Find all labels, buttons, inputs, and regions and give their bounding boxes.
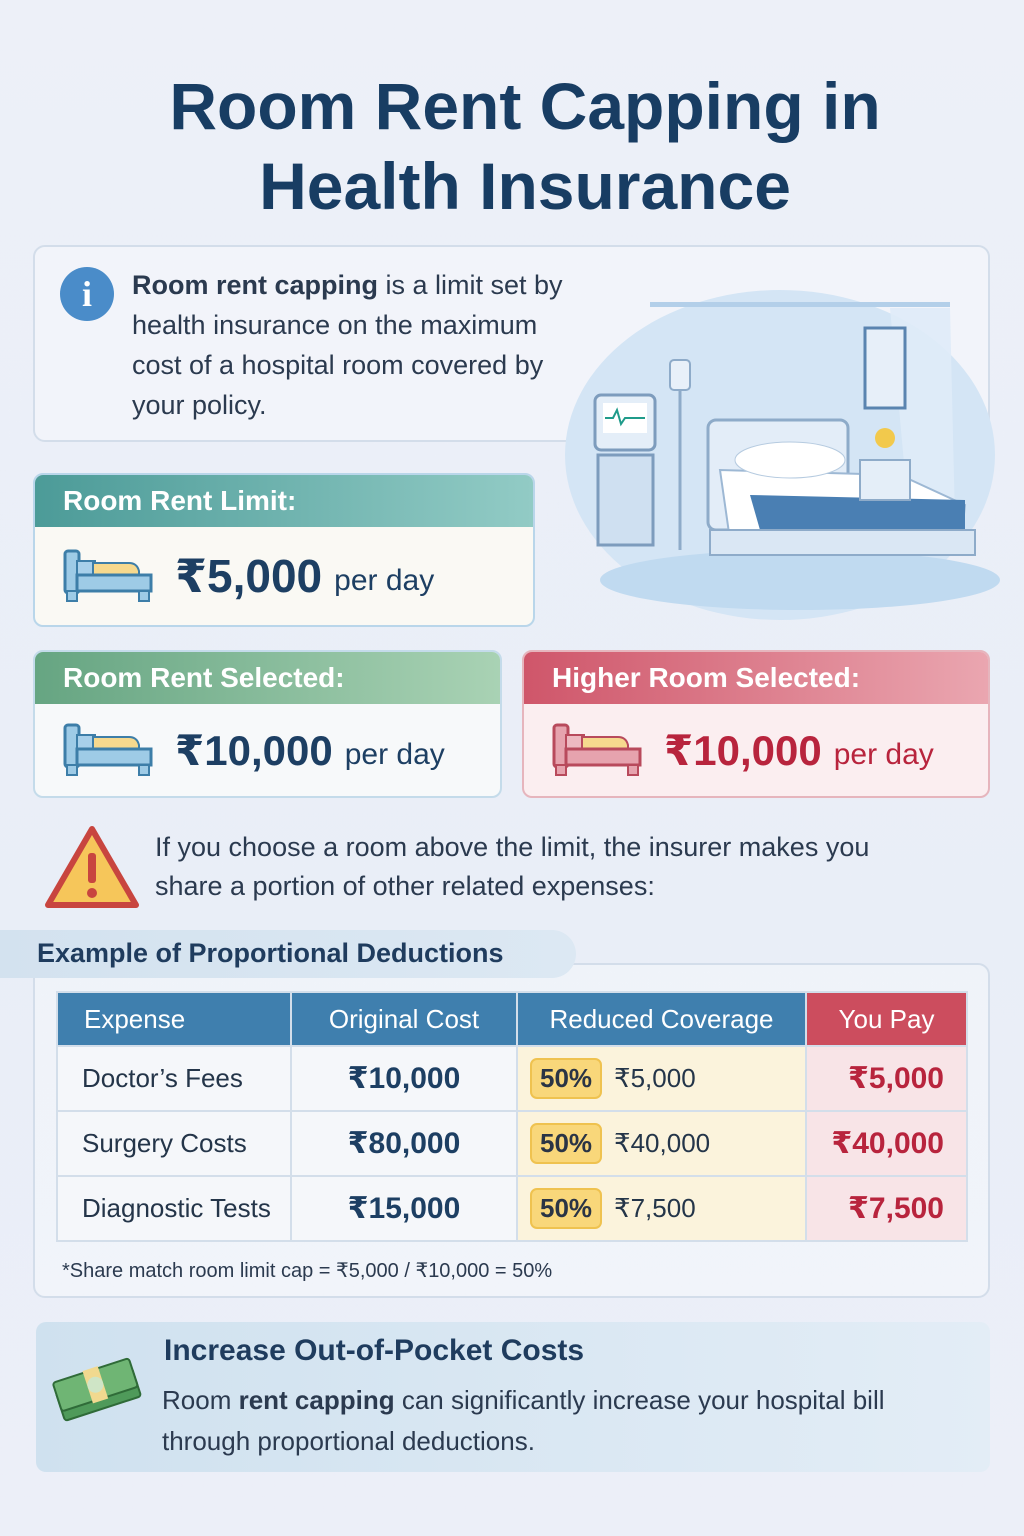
heading: out-of-pocket: Increase Out-of-Pocket Costs bbox=[164, 1334, 584, 1367]
text: out-of-pocket: Room rent capping can significantly increase your hospital bill through proportional deductions. bbox=[162, 1385, 885, 1456]
card: room rent selected: Room Rent Selected: bbox=[63, 662, 345, 693]
card: higher room selected: ₹10,000 bbox=[664, 726, 822, 774]
table: deductions: Original Cost bbox=[329, 1004, 479, 1034]
table: deductions: ₹10,000 bbox=[348, 1061, 460, 1096]
table: deductions: ₹7,500 bbox=[848, 1191, 944, 1226]
card: room rent limit bbox=[33, 473, 535, 627]
table: deductions: ₹5,000 bbox=[614, 1063, 696, 1094]
card: room rent limit: Room Rent Limit: bbox=[63, 485, 296, 516]
table: deductions: 50% bbox=[540, 1063, 592, 1093]
table: deductions: You Pay bbox=[839, 1004, 934, 1034]
table: deductions: Diagnostic Tests bbox=[82, 1193, 271, 1223]
panel: definition bbox=[33, 245, 990, 442]
card: room rent selected: per day bbox=[345, 738, 445, 771]
title: Room Rent Capping in bbox=[169, 69, 881, 143]
card: room rent limit: per day bbox=[334, 564, 434, 597]
icon: bed red bbox=[552, 724, 642, 776]
card: room rent selected bbox=[33, 650, 502, 798]
table: deductions: ₹80,000 bbox=[348, 1126, 460, 1161]
table: deductions: 50% bbox=[540, 1193, 592, 1223]
table: deductions: ₹15,000 bbox=[348, 1191, 460, 1226]
title: Health Insurance bbox=[259, 149, 791, 223]
card: room rent limit: ₹5,000 bbox=[175, 549, 322, 603]
title bbox=[169, 69, 881, 223]
icon: warning bbox=[45, 826, 139, 908]
table: deductions: ₹40,000 bbox=[831, 1126, 944, 1161]
card: room rent selected: ₹10,000 bbox=[175, 726, 333, 774]
table: deductions: ₹7,500 bbox=[614, 1193, 696, 1224]
icon: bed bbox=[64, 724, 152, 776]
icon: info: i bbox=[82, 274, 92, 314]
section heading bbox=[0, 930, 576, 978]
table: deductions: ₹40,000 bbox=[614, 1128, 710, 1159]
table: deductions: 50% bbox=[540, 1128, 592, 1158]
icon: info bbox=[60, 267, 114, 321]
table: deductions bbox=[56, 991, 968, 1242]
table: deductions: Surgery Costs bbox=[82, 1128, 247, 1158]
panel: out-of-pocket bbox=[36, 1322, 990, 1472]
card: higher room selected bbox=[522, 650, 990, 798]
illustration: hospital room bbox=[565, 290, 1000, 620]
warning text: If you choose a room above the limit, the insurer makes you share a portion of other related expenses: bbox=[155, 832, 869, 901]
card: higher room selected: per day bbox=[834, 738, 934, 771]
footnote: *Share match room limit cap = ₹5,000 / ₹10,000 = 50% bbox=[62, 1258, 552, 1282]
table: deductions: Expense bbox=[84, 1004, 185, 1034]
table: deductions: Reduced Coverage bbox=[549, 1004, 774, 1034]
definition text: Room rent capping is a limit set by health insurance on the maximum cost of a hospital room covered by your policy. bbox=[132, 270, 563, 420]
section heading: Example of Proportional Deductions bbox=[37, 938, 504, 968]
table: deductions: ₹5,000 bbox=[848, 1061, 944, 1096]
icon: bed bbox=[64, 550, 152, 602]
icon: money bbox=[52, 1358, 142, 1422]
card: higher room selected: Higher Room Selected: bbox=[552, 662, 860, 693]
table: deductions: Doctor’s Fees bbox=[82, 1063, 243, 1093]
panel: table bbox=[33, 963, 990, 1298]
